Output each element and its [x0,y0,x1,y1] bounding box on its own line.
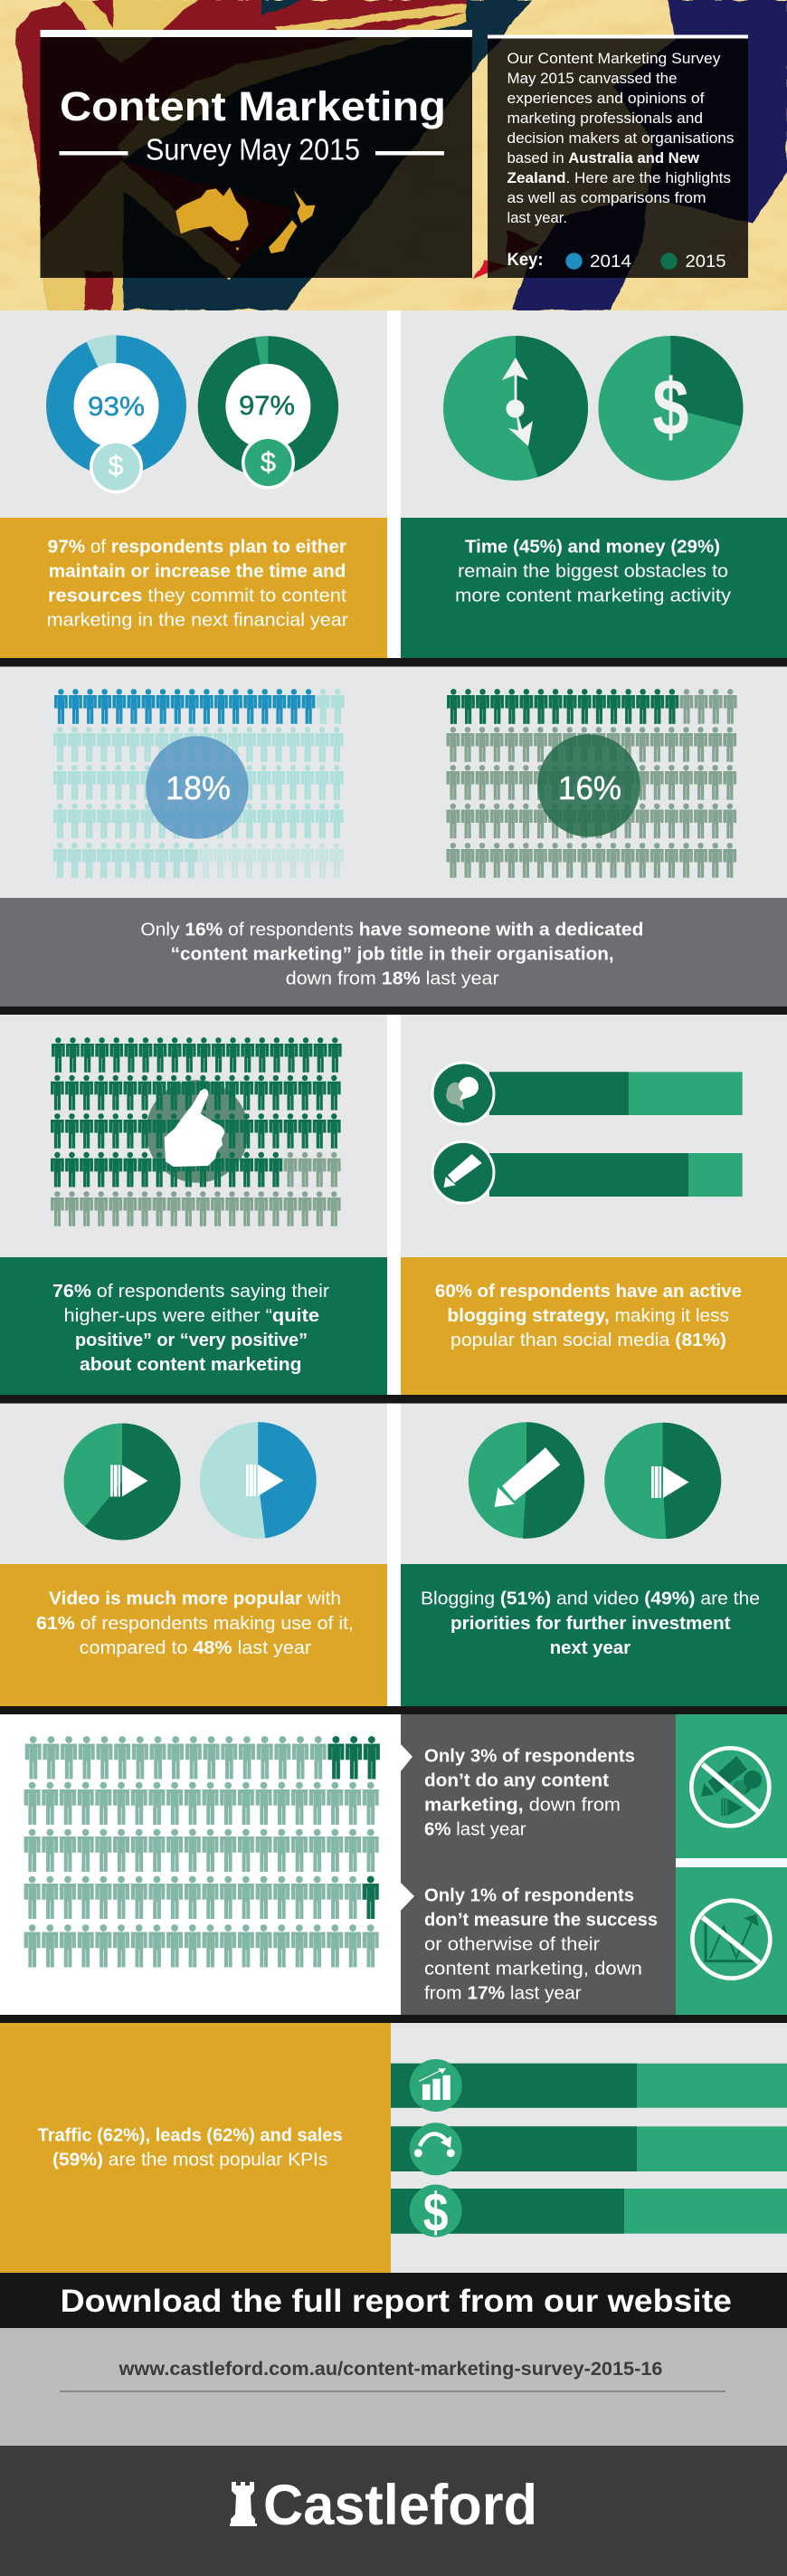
panel: website link: www.castleford.com.au/content-marketing-survey-2015-16 [118,2359,662,2380]
caption: more content marketing activity [455,586,732,606]
pie chart: time 45% [443,336,588,481]
panel: investment priorities [401,1403,787,1706]
intro text: May 2015 canvassed the [507,70,677,87]
panel: KPI text [0,2023,391,2273]
caption: Time (45%) and money (29%) [465,537,720,558]
bar: sales 59% [391,2182,787,2243]
text: don't do content marketing: 6% last year [424,1819,526,1840]
panel: blogging strategy [401,1015,787,1395]
caption [47,537,348,631]
icon: rook logo [230,2482,257,2526]
intro text: experiences and opinions of [507,90,705,107]
bar: blogging 60% [431,1140,743,1205]
intro panel [488,34,748,278]
pie chart: money 29%: $ [652,362,688,452]
text: don't do content marketing: don’t do any content [424,1770,609,1791]
intro text: marketing professionals and [507,110,703,127]
text: don't measure success: content marketing, down [424,1959,642,1980]
flag artwork [15,0,787,310]
bar: traffic 62% [391,2059,787,2112]
panel: investment intentions [0,310,387,658]
panel: non-adopter statistics [401,1714,676,2015]
donut chart: 97% in 2015: $ [261,446,276,478]
caption: higher-ups were either “ quite [63,1305,319,1326]
caption: marketing in the next financial year [47,610,348,631]
pictogram: 76% with thumbs up [51,1037,342,1226]
text: don't measure success [424,1885,658,2004]
caption: about content marketing [80,1354,302,1375]
text: don't do content marketing: marketing, down from [424,1795,621,1816]
bar: social media 81% [431,1061,743,1126]
icon: pencil [443,1154,482,1188]
caption: Only 16% of respondents have someone with a dedicated [140,919,643,940]
callout arrow [401,1744,412,1771]
panel: video popularity [0,1403,387,1706]
icon: growth chart [419,2068,450,2100]
pie chart: video 49% [604,1423,721,1539]
caption: 61% of respondents making use of it, [36,1613,354,1634]
panel: website link [0,2328,787,2446]
caption: down from 18% last year [286,968,499,989]
caption: Blogging (51%) and video (49%) are the [421,1589,760,1609]
donut chart: 93% in 2014: 93% [88,392,145,422]
legend key: Key: [507,251,543,270]
callout arrow [401,1883,414,1911]
hero section [0,0,787,310]
caption: remain the biggest obstacles to [458,561,728,582]
pictogram: 16% in 2015 [447,689,737,878]
text: don't measure success: from 17% last year [424,1983,582,2004]
caption [36,1589,354,1658]
caption [52,1281,329,1375]
parchment background [0,0,787,310]
text: don't do content marketing [424,1746,635,1840]
text: don't measure success: or otherwise of their [424,1934,600,1955]
caption: resources they commit to content [48,586,346,606]
pictogram: 18% in 2014 [53,689,345,878]
donut chart: 93% in 2014: $ [109,450,123,482]
banner: download heading: Download the full report from our website [61,2284,732,2319]
icon: clock hands [502,358,533,446]
panel: KPI bars [391,2023,787,2273]
caption: 97% of respondents plan to either [48,537,346,558]
icon: thumbs up [165,1089,224,1167]
panel: obstacles [401,310,787,658]
text: don't measure success: Only 1% of respondents [424,1885,634,1906]
panel: dedicated job title [0,666,787,1007]
panel: KPI text: (59%) are the most popular KPIs [52,2150,327,2171]
donut chart: 97% in 2015: 97% [239,391,295,421]
intro text: last year. [507,209,567,226]
pie chart: video 61% [63,1423,181,1541]
intro text: based in Australia and New [507,149,700,167]
pictogram: 16% in 2015: 16% [558,769,621,806]
intro text [507,50,735,226]
intro text: as well as comparisons from [507,189,706,206]
logo wordmark: Castleford [263,2474,537,2537]
banner: download heading [0,2273,787,2328]
caption: blogging strategy, making it less [447,1305,729,1326]
subheading: Survey May 2015 [146,133,360,167]
pie chart: video 48% [200,1422,317,1539]
donut chart: 93% in 2014 [46,335,186,493]
caption: priorities for further investment [450,1613,731,1634]
icon: pencil [495,1447,560,1507]
icon panel: no measurement [676,1867,787,2015]
caption: Video is much more popular with [49,1589,341,1609]
bar: sales 59%: $ [423,2182,449,2243]
footer [0,2446,787,2576]
caption [455,537,732,606]
legend key: 2014 [590,253,631,272]
donut chart: 97% in 2015 [198,336,338,489]
caption: compared to 48% last year [80,1637,311,1658]
icon: speech bubbles [446,1077,479,1110]
pictogram: non-adopters [24,1736,380,1967]
intro text: decision makers at organisations [507,129,735,147]
bar: leads 62% [391,2123,787,2175]
caption: 76% of respondents saying their [52,1281,329,1302]
icon: map of Australia and New Zealand [175,187,316,253]
text: don't measure success: don’t measure the success [424,1910,658,1931]
legend key [508,253,725,270]
caption: 60% of respondents have an active [435,1281,742,1302]
heading: Content Marketing [60,83,446,129]
title panel [40,30,472,278]
icon panel: no content [676,1714,787,1858]
caption: popular than social media (81%) [450,1330,726,1350]
icon: conversion arrow [414,2134,455,2157]
panel: KPI text: Traffic (62%), leads (62%) and sales [38,2125,343,2146]
legend key: 2015 [686,253,725,272]
caption [140,919,643,989]
caption: maintain or increase the time and [49,561,346,582]
panel: higher-ups positive [0,1015,387,1395]
caption: “content marketing” job title in their organisation, [171,944,614,965]
pie chart: money 29% [598,336,743,481]
pictogram: 18% in 2014: 18% [166,769,231,806]
caption: next year [550,1637,631,1658]
intro text: Our Content Marketing Survey [507,50,721,67]
caption [435,1281,742,1350]
caption [421,1589,760,1658]
pie chart: blogging 51% [469,1422,584,1539]
intro text: Zealand. Here are the highlights [507,169,731,186]
caption: positive” or “very positive” [75,1330,308,1350]
text: don't do content marketing: Only 3% of respondents [424,1746,635,1767]
